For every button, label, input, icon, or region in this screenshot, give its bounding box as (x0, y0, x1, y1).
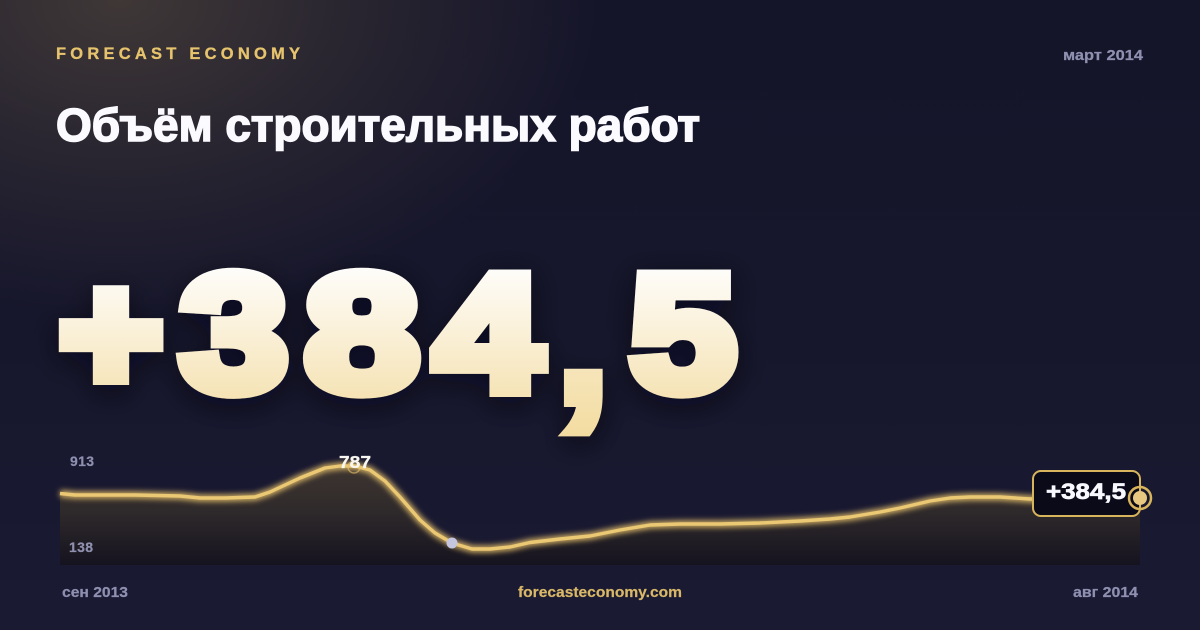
big value: 5 (630, 241, 736, 425)
big value (60, 231, 736, 443)
date label: март 2014 (1063, 47, 1144, 64)
value badge (1033, 471, 1140, 516)
line chart (60, 452, 1151, 565)
axis max: 913 (70, 453, 94, 469)
source link: forecasteconomy.com (518, 584, 682, 601)
end marker (1129, 487, 1151, 509)
peak marker (348, 461, 360, 473)
big value: 3 (180, 241, 288, 426)
title: Объём строительных работ (56, 99, 700, 151)
axis min: 138 (69, 539, 93, 555)
big value: + (60, 242, 162, 426)
end label: авг 2014 (1073, 584, 1139, 601)
chart area fill (60, 466, 1140, 565)
big value: , (555, 231, 611, 443)
big value: 4 (434, 241, 542, 426)
big value: 8 (305, 242, 419, 426)
brand label: FORECAST ECONOMY (56, 45, 300, 63)
start label: сен 2013 (62, 584, 128, 601)
line (60, 466, 1140, 549)
line glow (60, 466, 1140, 549)
peak value: 787 (339, 452, 371, 472)
value badge: +384,5 (1046, 479, 1126, 504)
low marker (446, 538, 458, 548)
